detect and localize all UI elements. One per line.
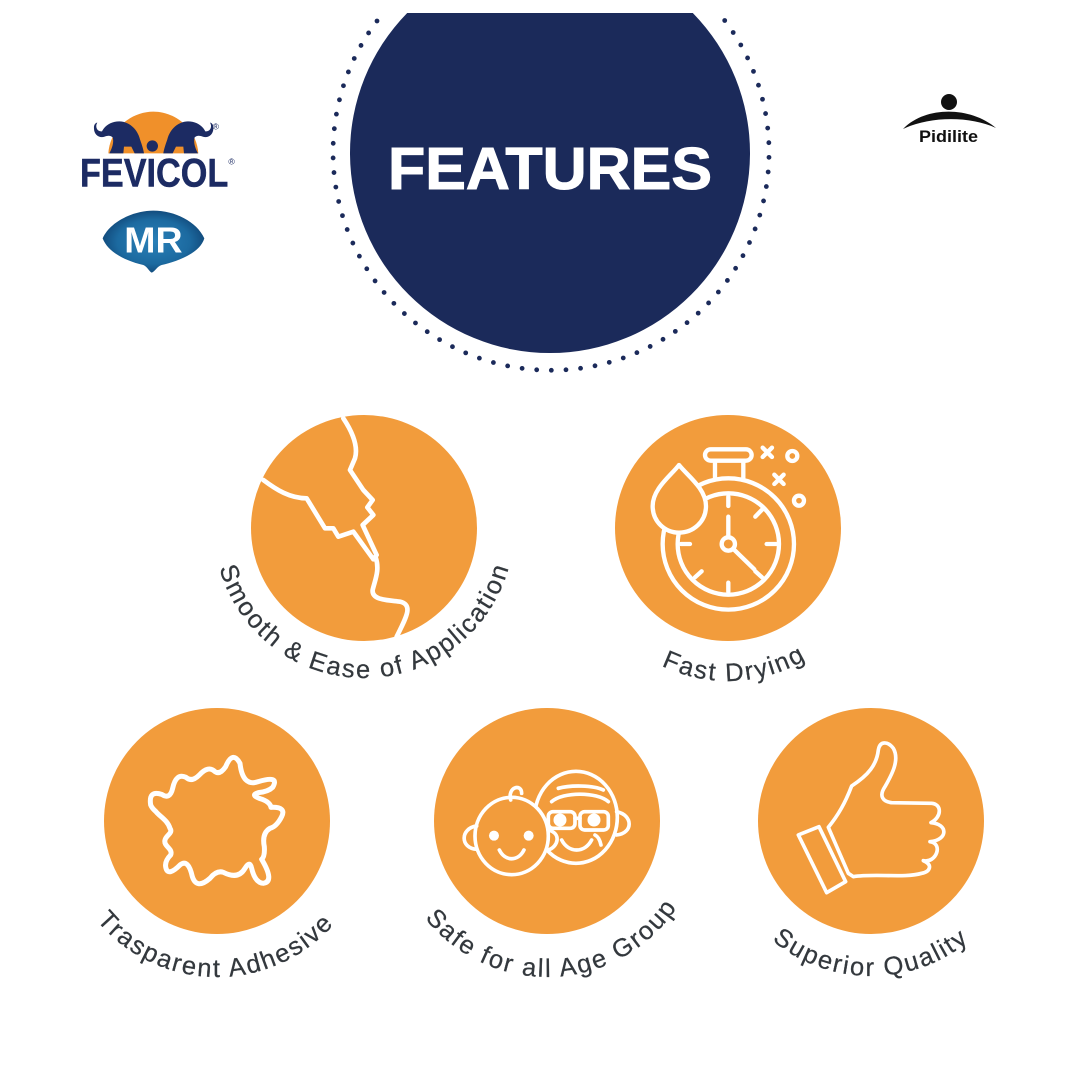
icon: stopwatch and drop xyxy=(653,448,804,610)
label: Trasparent Adhesive xyxy=(100,908,331,978)
head dot xyxy=(941,94,957,110)
icon: glue nozzle xyxy=(263,418,407,637)
wordmark: Pidilite xyxy=(919,127,978,146)
logo: Fevicol xyxy=(80,112,235,196)
feature: fast drying xyxy=(615,415,841,684)
swoosh xyxy=(903,112,996,129)
feature: smooth and ease of application xyxy=(220,415,508,678)
orange sun xyxy=(108,112,198,153)
icon: thumbs up xyxy=(798,743,944,893)
registered mark top: ® xyxy=(213,121,220,131)
label: Superior Quality xyxy=(774,929,966,978)
right elephant xyxy=(163,121,213,153)
label: Fast Drying xyxy=(663,648,806,684)
navy circle xyxy=(350,13,750,353)
feature: transparent adhesive xyxy=(100,708,331,978)
label: Safe for all Age Group xyxy=(428,902,676,978)
icon: baby and grandparent faces xyxy=(464,771,629,875)
orange disc xyxy=(434,708,660,934)
title badge xyxy=(333,13,769,370)
label: Smooth & Ease of Application xyxy=(220,565,508,678)
logo: Pidilite xyxy=(903,94,996,146)
orange disc xyxy=(758,708,984,934)
badge shape xyxy=(103,211,204,273)
registered mark wordmark: ® xyxy=(228,157,235,167)
orange disc xyxy=(104,708,330,934)
emblem xyxy=(147,140,158,152)
orange disc xyxy=(615,415,841,641)
feature: safe for all age group xyxy=(428,708,676,978)
feature: superior quality xyxy=(758,708,984,978)
badge text: MR xyxy=(124,220,183,261)
title text: FEATURES xyxy=(388,136,712,202)
dotted ring xyxy=(333,17,769,370)
wordmark: FEVICOL xyxy=(80,152,228,196)
left elephant xyxy=(94,121,144,153)
icon: adhesive blob xyxy=(150,757,283,884)
orange disc xyxy=(251,415,477,641)
logo: MR badge xyxy=(103,211,204,273)
